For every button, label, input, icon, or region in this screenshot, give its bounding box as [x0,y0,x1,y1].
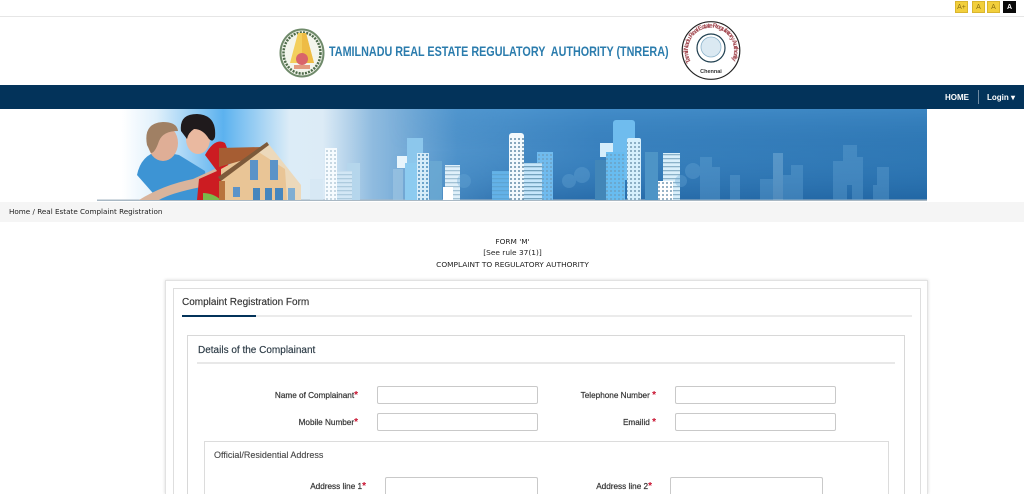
breadcrumb text: Home / Real Estate Complaint Registration [9,207,162,216]
font size button A small [987,1,1000,13]
nav link: login: Login ▾ [987,93,1015,102]
city skyline, bright buildings [310,120,680,200]
icon: TNRERA seal: Chennai [700,69,722,75]
contrast button A: A [1007,4,1012,10]
font size button A+ [955,1,968,13]
font size button A: A [976,4,981,10]
icon: TNRERA seal: Tamil Nadu Real Estate Regulatory Authority [683,23,739,64]
icon: TNRERA seal [682,21,740,80]
heading: organisation name: TAMILNADU REAL ESTATE REGULATORY AUTHORITY (TNRERA) [329,43,669,59]
label: mobile number: Mobile Number* [299,417,358,428]
input: email id [675,413,836,431]
heading: details of the complainant: Details of the Complainant [198,345,315,356]
font size button A small: A [991,4,996,10]
nav link: home: HOME [945,93,969,102]
woman in red top [181,114,229,200]
icon: Tamil Nadu emblem [280,28,324,78]
panel: official/residential address [204,441,889,494]
label: telephone number: Telephone Number * [581,390,656,401]
header band [0,17,1024,85]
form title block [436,237,589,269]
city skyline, faded buildings [457,145,889,200]
house [218,142,301,200]
form title block: [See rule 37(1)] [483,248,542,257]
label: address line 2: Address line 2* [596,481,652,492]
label: name of complainant: Name of Complainant* [275,390,358,401]
panel: complaint registration form [165,280,928,494]
banner illustration [97,109,927,201]
label: address line 1: Address line 1* [310,481,366,492]
contrast button A [1003,1,1016,13]
navigation bar [0,85,1024,109]
label: email id: Emailid * [623,417,656,428]
form title block: FORM 'M' [495,237,530,246]
input: telephone number [675,386,836,404]
breadcrumb bar [0,202,1024,222]
heading: complaint registration form: Complaint Registration Form [182,297,309,308]
input: mobile number [377,413,538,431]
heading underline accent [182,315,912,317]
man in blue shirt pointing [137,122,219,200]
panel: details of the complainant [187,335,905,494]
top accessibility bar [0,0,1024,17]
banner background [97,109,927,201]
font size button A+: A+ [957,4,966,10]
input: address line 1 [385,477,538,494]
heading: official/residential address: Official/Residential Address [214,450,323,460]
input: address line 2 [670,477,823,494]
form title block: COMPLAINT TO REGULATORY AUTHORITY [436,260,589,269]
panel: inner frame [173,288,921,494]
input: name of complainant [377,386,538,404]
font size button A [972,1,985,13]
